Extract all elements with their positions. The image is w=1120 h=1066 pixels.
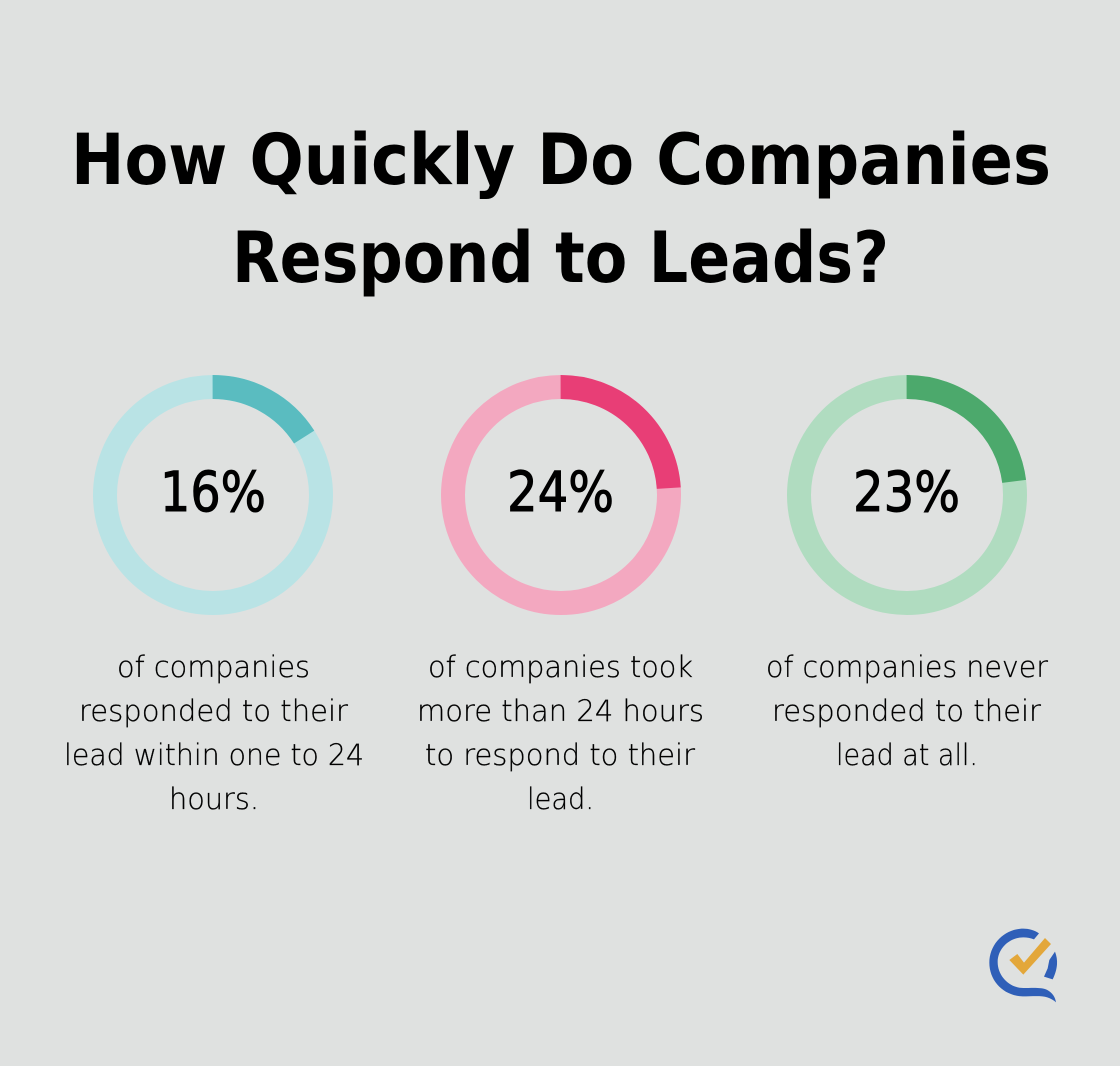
- description text: to respond to their: [425, 738, 695, 772]
- description text: of companies: [117, 650, 310, 684]
- icon: logo speech bubble with check mark: [989, 929, 1057, 1002]
- title: Respond to Leads?: [232, 217, 889, 299]
- title: [71, 119, 1051, 299]
- panel: 24% took more than 24 hours: [417, 387, 704, 816]
- description text: lead.: [527, 782, 594, 816]
- donut chart: 16%: [105, 387, 321, 603]
- description text: [766, 650, 1048, 772]
- panel: 16% responded within one to 24 hours: [64, 387, 364, 816]
- description text: of companies took: [428, 650, 693, 684]
- donut chart: 23%: [799, 387, 1015, 603]
- description text: of companies never: [766, 650, 1048, 684]
- description text: lead within one to 24: [64, 738, 364, 772]
- description text: [417, 650, 704, 816]
- value: 23%: 23%: [853, 460, 960, 524]
- description text: more than 24 hours: [417, 694, 704, 728]
- panel: 23% never responded: [766, 387, 1048, 772]
- description text: hours.: [169, 782, 259, 816]
- description text: responded to their: [772, 694, 1041, 728]
- value: 24%: 24%: [507, 460, 614, 524]
- description text: lead at all.: [836, 738, 978, 772]
- description text: responded to their: [79, 694, 348, 728]
- title: How Quickly Do Companies: [71, 119, 1051, 201]
- donut chart: 24%: [453, 387, 669, 603]
- value: 16%: 16%: [160, 460, 266, 524]
- description text: [64, 650, 364, 816]
